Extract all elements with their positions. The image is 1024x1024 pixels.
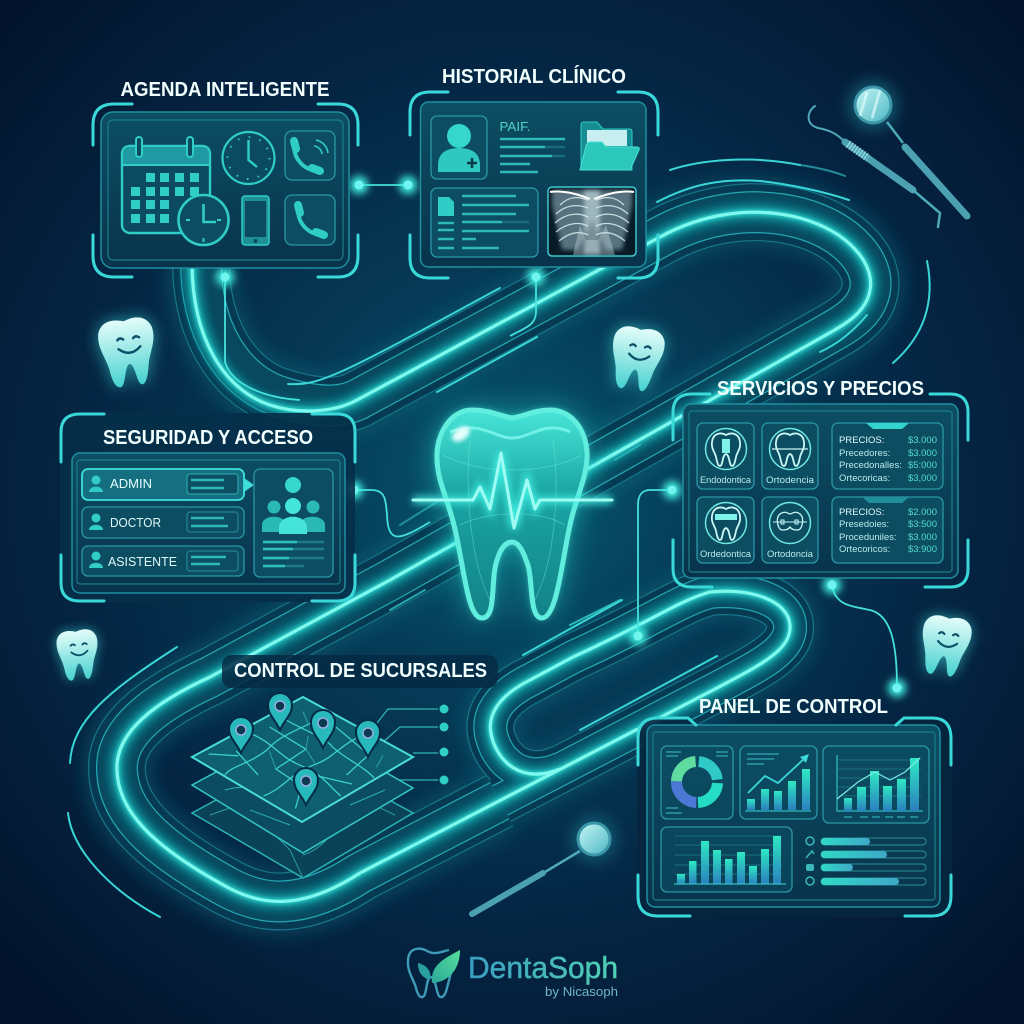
price list 1: $3.000 [908,435,937,446]
panel: Panel de Control [637,696,952,917]
role row: Admin [82,469,254,500]
price list 1: $3.000 [908,448,937,459]
byline: by Nicasoph [545,984,618,999]
flowing neon ribbon [117,212,871,901]
x-ray image [548,187,636,256]
map layer 1 [192,697,413,822]
combined chart card [823,746,929,823]
price list 2: Proceduniles: [839,532,897,543]
icon: phone tile [285,195,335,245]
progress bars [806,837,926,885]
patient label and lines [500,119,565,172]
logo icon [408,949,460,997]
icon: dental mirror lower [472,817,616,914]
service tile: Ordedontica [697,497,754,563]
icon: calendar [122,137,210,233]
price list 1: Precedonalles: [839,460,902,471]
price list 1: $5:000 [908,460,937,471]
connectors between panels [216,176,906,697]
icon: phone tile with signal [285,131,335,180]
icon: dental explorer tool [809,106,940,227]
role row: Doctor: DOCTOR [110,515,161,530]
smiling tooth: right [917,613,974,679]
price list 2: $3.000 [908,532,937,543]
service tile: Ordedontica: Ordedontica [700,549,752,560]
role row: Asistente: ASISTENTE [108,554,177,569]
panel: Servicios y Precios [673,378,968,587]
panel: Historial Clínico [410,65,658,278]
map layer 2 [192,725,413,853]
users group card [254,469,333,577]
smiling tooth: upper center [607,324,667,393]
heading: Seguridad: SEGURIDAD Y ACCESO [103,427,313,449]
panel: Seguridad y Acceso [60,413,355,602]
price list 1: PRECIOS: [839,435,884,446]
accent light streaks [68,160,930,917]
connector lines to dots [377,704,448,784]
icon: small clock [178,195,228,245]
map pins [229,693,380,805]
trend bar chart card [740,746,817,819]
heartbeat line [413,453,612,528]
service tile: Ortodencia [762,423,818,489]
price list 2: $3:900 [908,544,937,555]
price list 2: $3:500 [908,519,937,530]
price list 2 [832,497,943,563]
heading: Agenda: AGENDA INTELIGENTE [120,79,330,101]
price list 1: Ortecoricas: [839,473,890,484]
smiling tooth: upper left [96,315,160,390]
price list 2: $2.000 [908,507,937,518]
donut chart card [661,746,733,819]
price list 2: Presedoies: [839,519,889,530]
icon: folder [580,122,639,170]
service tile: Ortodoncia [762,497,818,563]
role row: Asistente [82,546,244,576]
price list 1: $3,000 [908,473,937,484]
service tile: Endodontica: Endodontica [700,475,752,486]
price list 2: Ortecoricos: [839,544,890,555]
wordmark: DentaSoph [468,950,618,985]
service tile: Ortodencia: Ortodencia [766,475,815,486]
role row: Doctor [82,507,244,538]
price list 1 [832,423,943,489]
panel: Agenda Inteligente [93,79,358,277]
service tile: Endodontica [697,423,754,489]
panel: Control de Sucursales [192,655,498,878]
document card [431,188,538,257]
service tile: Ortodoncia: Ortodoncia [767,549,814,560]
map layer 3 [192,753,413,878]
patient label and lines: PAIF. [500,119,530,134]
icon: dental mirror tool [849,81,967,216]
heading: Historial: HISTORIAL CLÍNICO [442,65,626,88]
icon: smartphone [242,196,269,245]
patient card [431,116,487,179]
heading: Servicios: SERVICIOS Y PRECIOS [717,378,924,400]
heading: Sucursales: CONTROL DE SUCURSALES [234,660,487,682]
logo: DentaSoph [408,949,618,999]
price list 1: Precedores: [839,448,890,459]
role row: Admin: ADMIN [110,476,152,491]
heading: Panel: PANEL DE CONTROL [699,696,888,718]
price list 2: PRECIOS: [839,507,884,518]
icon: wall clock [222,132,274,184]
smiling tooth: lower left [55,628,101,682]
large bar chart card [661,827,792,892]
central tooth hero [413,410,612,618]
